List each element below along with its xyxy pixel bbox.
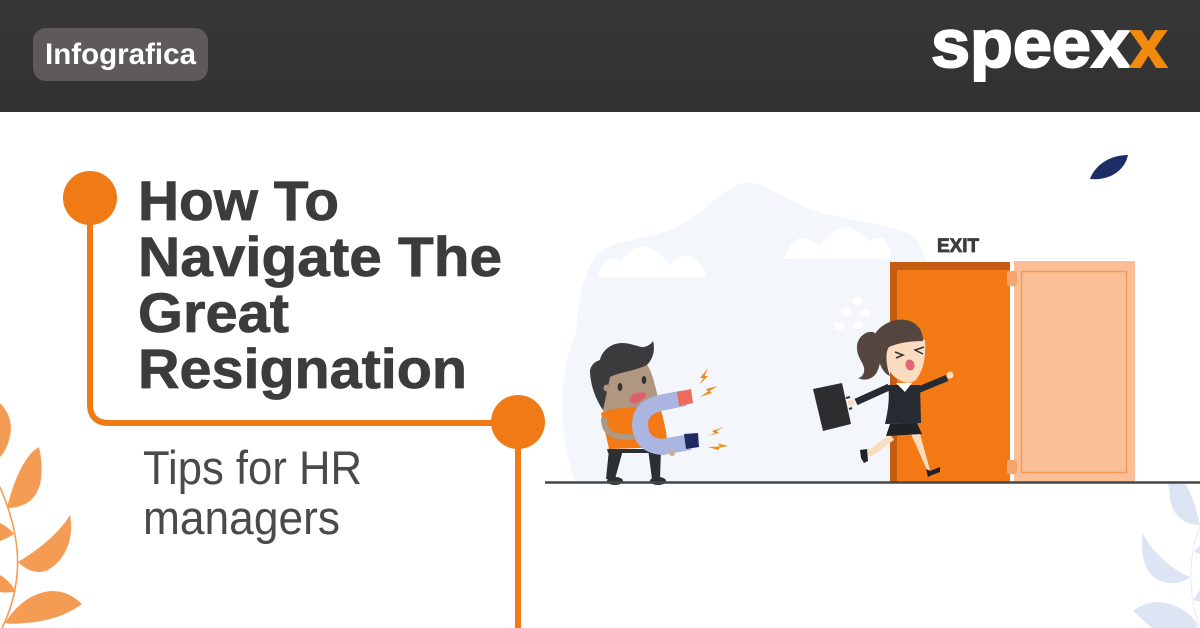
title: How To [138,169,339,232]
exit door [890,261,1135,482]
dust puffs [834,297,870,330]
title [138,169,502,400]
title: Resignation [138,337,467,400]
illustration: woman with briefcase [813,320,954,477]
badge: Infografica [33,28,208,81]
timeline connector [63,171,545,628]
illustration: man with magnet [590,341,728,485]
title: Great [138,281,289,344]
badge: Infografica: Infografica [45,38,196,71]
header bar [0,0,1200,112]
title: Navigate The [138,225,502,288]
logo: speexx: x [1130,6,1167,82]
subtitle: Tips for HR [143,441,362,494]
navy leaf [1090,155,1128,179]
ground line [545,481,1200,484]
logo: speexx: speex [931,6,1130,82]
exit label: EXIT [937,236,979,257]
decorative orange leaves [0,403,82,628]
decorative blue leaves [1133,483,1200,628]
subtitle: managers [143,491,340,544]
background blob with clouds [562,183,926,481]
subtitle [143,441,362,544]
